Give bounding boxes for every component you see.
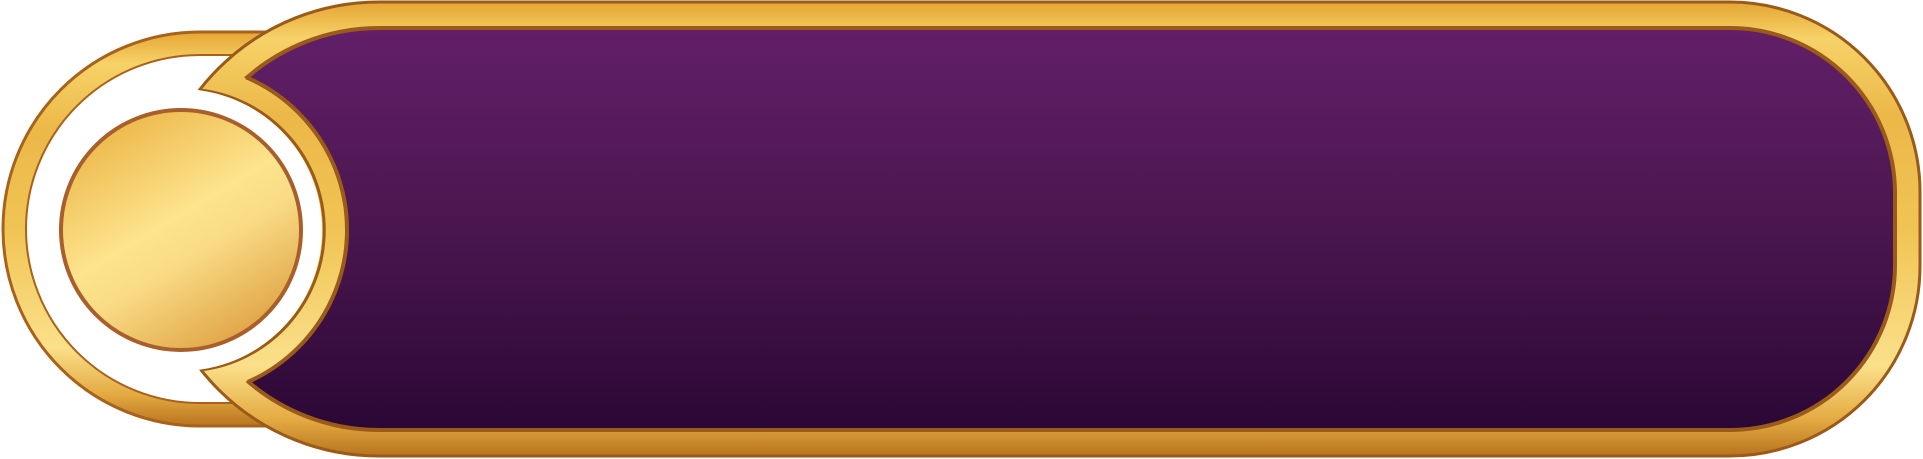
left ring	[3, 32, 603, 426]
purple left edge outline	[245, 77, 349, 382]
purple panel	[178, 28, 1895, 430]
gold disc	[61, 110, 301, 350]
frame inner edge around disc	[200, 90, 324, 370]
